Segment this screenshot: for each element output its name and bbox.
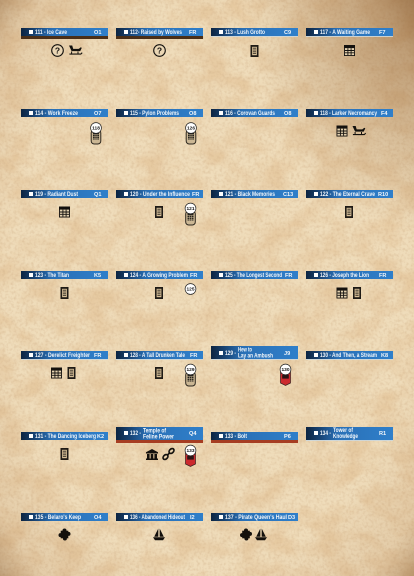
header: 131 The Dancing Iceberg: K2 [97,434,104,440]
header: 119 Radiant Dust: 119 - Radiant Dust [35,191,78,198]
icon: 112 question [154,45,165,56]
header: 130 And Then, a Stream: K8 [381,353,388,359]
header: 119 Radiant Dust [21,190,108,198]
icon: 122 document [345,206,353,218]
icon: 132 key [162,448,175,460]
header: 113 Lush Grotto: 113 - Lush Grotto [225,29,265,36]
header: 132 Temple of Feline Power: Feline Power [143,433,174,440]
header: 137 Pirate Queen's Haul: 137 - Pirate Queen's Haul [225,514,287,521]
header: 124 A Growing Problem: 124 - A Growing Problem [130,272,188,279]
header: 115 Pylon Problems: 115 - Pylon Problems [130,110,179,117]
header: 125 The Longest Second: 125 - The Longest Second [225,272,282,279]
token: 114 links to 118 [91,123,101,144]
header: 121 Black Memories: 121 - Black Memories [225,191,275,198]
header: 129 Hew to Lay an Ambush: Hew to [238,347,252,354]
header: 135 Belaro's Keep: O4 [94,515,102,521]
header: 125 The Longest Second: FR [285,273,292,279]
header: 128 A Tall Drunken Tale: FR [190,353,197,359]
header: 129 Hew to Lay an Ambush [211,346,298,360]
token: 128 links to 129: 129 [186,367,195,373]
header: 111 Ice Cave: 111 - Ice Cave [35,29,67,36]
header: 132 Temple of Feline Power [116,427,203,443]
token: 120 links to 121: 121 [186,206,195,212]
header: 118 Larker Necromancy: 118 - Larker Necromancy [320,110,377,117]
header: 111 Ice Cave [21,28,108,39]
header: 117 A Waiting Game [306,28,393,37]
header: 114 Work Freeze: 114 - Work Freeze [35,110,78,117]
header: 113 Lush Grotto [211,28,298,37]
header: 126 Joseph the Lion: 126 - Joseph the Lion [320,272,369,279]
icon: 124 document [155,287,163,299]
icons: 111 question and sleigh [52,45,82,56]
header: 118 Larker Necromancy: F4 [381,111,388,117]
header: 123 The Titan [21,271,108,279]
icons: 126 table and document [336,287,361,299]
header: 122 The Eternal Crave [306,190,393,198]
icon: 119 table [59,206,70,218]
header: 132 Temple of Feline Power: Q4 [189,431,197,437]
token: 132 links to 133: 133 [186,448,195,454]
header: 126 Joseph the Lion [306,271,393,279]
header: 131 The Dancing Iceberg [21,432,108,440]
token: 129 links to 130 [280,364,291,386]
header: 132 Temple of Feline Power: 132 - [130,430,141,437]
header: 113 Lush Grotto: C9 [284,30,291,36]
icons: 137 puzzle and ship [240,528,267,540]
header: 134 Tower of Knowledge: Tower of [333,427,354,434]
header: 126 Joseph the Lion: FR [379,273,386,279]
header: 116 Corovan Guards [211,109,298,117]
header: 129 Hew to Lay an Ambush: 129 - [225,350,236,357]
icon: 113 document [250,45,258,57]
header: 122 The Eternal Crave: 122 - The Eternal Crave [320,191,375,198]
icon: 117 table [344,45,355,56]
header: 130 And Then, a Stream [306,351,393,360]
token: 124 links to 125 [185,284,196,294]
header: 136 Abandoned Hideout: 136 - Abandoned Hideout [130,514,185,521]
header: 134 Tower of Knowledge [306,427,393,441]
header: 114 Work Freeze [21,109,108,117]
header: 119 Radiant Dust: Q1 [94,192,101,198]
header: 114 Work Freeze: O7 [94,111,101,117]
header: 117 A Waiting Game: 117 - A Waiting Game [320,29,370,36]
icon: 120 document [155,206,163,218]
header: 123 The Titan: K5 [94,273,101,279]
header: 122 The Eternal Crave: R10 [378,192,388,198]
header: 120 Under the Influence: 120 - Under the Influence [130,191,190,198]
icon: 123 document [60,287,68,299]
icon: 136 ship [153,528,165,540]
header: 134 Tower of Knowledge: Knowledge [333,433,358,440]
header: 133 Bolt: P6 [284,434,291,440]
header: 121 Black Memories: C13 [283,192,293,198]
token: 124 links to 125: 125 [186,287,195,293]
header: 116 Corovan Guards: 116 - Corovan Guards [225,110,275,117]
header: 111 Ice Cave: O1 [94,30,101,36]
token: 128 links to 129 [185,364,196,386]
header: 132 Temple of Feline Power: Temple of [143,427,167,434]
header: 130 And Then, a Stream: 130 - And Then, a Stream [320,352,377,359]
header: 124 A Growing Problem: FR [190,273,197,279]
header: 129 Hew to Lay an Ambush: Lay an Ambush [238,353,273,360]
header: 127 Derelict Freighter: FR [94,353,101,359]
token: 120 links to 121 [185,203,196,225]
header: 134 Tower of Knowledge: 134 - [320,430,331,437]
icon: 132 temple [146,449,158,460]
header: 120 Under the Influence: FR [192,192,199,198]
icon: 128 document [155,367,163,379]
header: 115 Pylon Problems [116,109,203,117]
header: 123 The Titan: 123 - The Titan [35,272,69,279]
header: 115 Pylon Problems: O8 [189,111,196,117]
header: 133 Bolt: 133 - Bolt [225,433,247,440]
token: 115 links to 126 [186,123,196,144]
header: 127 Derelict Freighter [21,351,108,360]
icon: 135 puzzle [58,528,70,540]
token: 129 links to 130: 130 [281,367,290,373]
header: 117 A Waiting Game: F7 [379,30,386,36]
header: 112 Raised by Wolves [116,28,203,39]
icon: 131 document [60,448,68,460]
header: 116 Corovan Guards: O8 [284,111,291,117]
header: 135 Belaro's Keep: 135 - Belaro's Keep [35,514,81,521]
icons: 118 table and sleigh [336,126,366,136]
token: 115 links to 126: 126 [187,126,195,132]
header: 112 Raised by Wolves: FR [189,30,196,36]
header: 133 Bolt [211,432,298,443]
header: 128 A Tall Drunken Tale: 128 - A Tall Drunken Tale [130,352,185,359]
header: 137 Pirate Queen's Haul: D3 [288,515,295,521]
header: 135 Belaro's Keep [21,513,108,521]
header: 136 Abandoned Hideout: I2 [190,515,195,521]
header: 128 A Tall Drunken Tale [116,351,203,360]
token: 132 links to 133 [185,445,196,466]
header: 129 Hew to Lay an Ambush: J9 [284,351,290,357]
header: 121 Black Memories [211,190,298,198]
header: 134 Tower of Knowledge: R1 [379,431,386,437]
token: 114 links to 118: 118 [92,126,100,132]
icons: 127 table and document [51,367,76,379]
header: 112 Raised by Wolves: 112- Raised by Wolves [130,29,182,36]
header: 131 The Dancing Iceberg: 131 - The Dancing Iceberg [35,433,96,440]
header: 127 Derelict Freighter: 127 - Derelict Freighter [35,352,90,359]
header: 125 The Longest Second [211,271,298,279]
